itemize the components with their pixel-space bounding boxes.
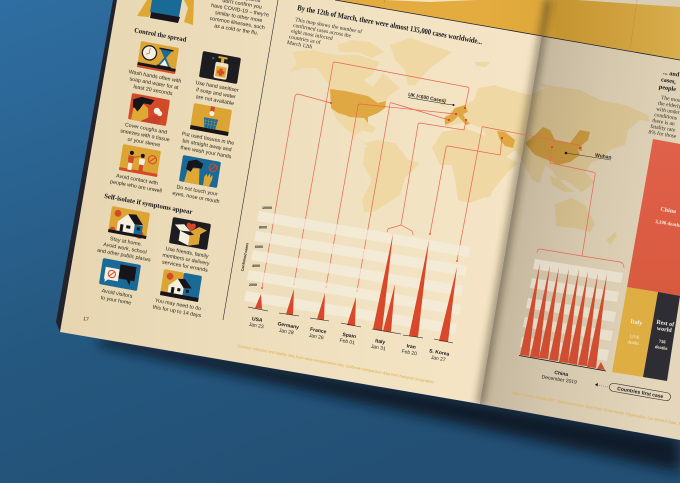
map markers xyxy=(261,102,581,292)
text block: right body: fatality rate xyxy=(650,123,676,134)
bands: China chart xyxy=(520,259,623,361)
China label: December 2019 xyxy=(541,374,577,386)
text block: symptoms note: similar to other more xyxy=(215,10,263,24)
heading: Self-isolate: Self-isolate if symptoms appear xyxy=(104,193,193,216)
icon card: avoid visitors: to your home xyxy=(100,295,132,307)
spike chart: confirmed cases per country xyxy=(255,234,457,342)
label: Wuhan xyxy=(565,152,612,161)
text block: symptoms note: have COVID-19 – they're xyxy=(211,3,269,19)
country labels: USA xyxy=(251,316,263,324)
icon card: up to 14 days: this for up to 14 days xyxy=(152,304,202,319)
country labels: Germany xyxy=(277,321,300,331)
text block: symptoms note: common illnesses, such xyxy=(209,16,265,31)
text block: right body: 8% for those xyxy=(648,129,677,140)
spine shadow xyxy=(480,0,548,404)
icon card: avoid contact xyxy=(110,143,168,195)
icon card: do not touch face: eyes, nose or mouth xyxy=(172,191,220,205)
icon card: friends and delivery: services for errands xyxy=(162,259,208,274)
country labels: France xyxy=(310,327,327,335)
text block: map intro: March 12th xyxy=(286,40,313,51)
icon card: wash hands: soap and water for at xyxy=(129,76,179,91)
chart axis labels xyxy=(241,206,272,287)
text block: symptoms note xyxy=(208,0,271,38)
icon card: cover coughs: Cover coughs and xyxy=(124,122,168,136)
icon card: avoid contact: Avoid contact with xyxy=(116,173,158,187)
treemap: Italy deaths xyxy=(612,287,658,377)
icon card: wash hands: Wash hands often with xyxy=(128,69,182,85)
column divider xyxy=(223,0,278,320)
legend: countries first case: Countries first case xyxy=(617,386,664,400)
country labels: Feb 20 xyxy=(401,349,418,357)
treemap: Italy deaths: deaths xyxy=(627,339,640,346)
chart axis labels: 10000 xyxy=(262,206,272,210)
country labels: Italy xyxy=(375,338,386,346)
text block: right body: conditions xyxy=(654,112,677,122)
treemap: rest of world deaths: deaths xyxy=(655,344,668,351)
treemap: Italy deaths: Italy xyxy=(630,319,643,327)
icon card: stay at home: Stay at home. xyxy=(109,236,142,248)
chart axis labels: 6000 xyxy=(255,245,263,249)
treemap: Italy deaths: 1,016 xyxy=(629,333,640,341)
icon card: up to 14 days xyxy=(152,268,207,319)
text block: map intro xyxy=(286,15,363,59)
panel: left page xyxy=(60,0,548,404)
country labels: Jan 26 xyxy=(308,333,324,341)
China baseline xyxy=(519,356,606,371)
icon card: cover coughs: sneezes with a tissue xyxy=(120,128,170,143)
treemap: rest of world deaths: world xyxy=(656,326,673,334)
text block: map intro: eight most infected xyxy=(290,28,333,42)
treemap: rest of world deaths xyxy=(643,292,680,381)
map: highlighted countries xyxy=(330,89,590,165)
icon card: stay at home xyxy=(97,205,158,264)
icon card: friends and delivery xyxy=(161,216,216,274)
text block: right heading: ... and xyxy=(663,69,680,79)
country labels: Spain xyxy=(342,332,356,340)
country labels: Jan 23 xyxy=(248,322,264,330)
icon card: cover coughs xyxy=(119,92,176,150)
icon card: stay at home: Avoid work, school xyxy=(103,242,147,256)
top yellow banner xyxy=(335,0,680,60)
text block: map intro: This map shows the number of xyxy=(295,16,363,35)
icon card: sanitiser xyxy=(193,51,244,108)
country labels xyxy=(248,316,450,363)
red connector lines xyxy=(262,62,624,291)
icon card: up to 14 days: You may need to do xyxy=(155,298,201,312)
icon card: sanitiser: are not available xyxy=(195,94,234,107)
country labels: Feb 01 xyxy=(339,338,356,346)
icon card: wash hands xyxy=(126,40,186,98)
source line left: Sources: Infection and fatality data from www.worldometers.info; Outbreak comparison data from National Geographic xyxy=(237,343,434,384)
text block: right heading xyxy=(658,69,680,93)
icon card: avoid visitors: Avoid visitors xyxy=(101,288,133,300)
country labels: Jan 27 xyxy=(430,355,446,363)
icon card: stay at home: and other public places xyxy=(97,248,151,264)
country labels: Jan 31 xyxy=(370,344,386,352)
chart axis labels: 2000 xyxy=(249,283,257,287)
treemap: China deaths xyxy=(627,139,680,297)
page number: 17 xyxy=(83,316,89,323)
text block: right body: there is an xyxy=(652,118,675,127)
magazine page stack edge xyxy=(56,0,117,332)
text block: map intro: confirmed cases across the xyxy=(293,22,352,40)
icon card: used tissues bin: bin straight away and xyxy=(182,138,232,153)
text block: right body xyxy=(648,94,680,142)
chart axis labels: 4000 xyxy=(252,264,260,268)
icon card: sanitiser: Use hand sanitiser xyxy=(195,80,239,94)
icon card: used tissues bin: Put used tissues in the xyxy=(181,131,235,147)
label: Wuhan: Wuhan xyxy=(595,153,612,161)
right page shading xyxy=(480,36,680,440)
country labels: Jan 28 xyxy=(278,328,294,336)
icon card: used tissues bin: then wash your hands xyxy=(180,145,232,160)
treemap: rest of world deaths: Rest of xyxy=(656,320,675,329)
treemap: China deaths: China xyxy=(660,207,676,215)
icon card: avoid contact: people who are unwell xyxy=(110,179,162,195)
text block: right heading: people xyxy=(658,84,677,93)
text block: symptoms note: as a cold or the flu. xyxy=(214,23,258,37)
country labels: Iran xyxy=(406,343,416,351)
country labels: S. Korea xyxy=(429,348,450,358)
text block: map intro: countries as of xyxy=(288,33,321,46)
text block: right heading: cases, xyxy=(661,76,677,86)
chart axis labels: 8000 xyxy=(259,226,267,230)
panel: right page xyxy=(480,0,680,440)
icon card: friends and delivery: Use friends, family xyxy=(165,246,209,260)
icon card: do not touch face xyxy=(172,154,226,205)
shadow under magazine xyxy=(100,336,680,472)
chart axis labels: Confirmed cases xyxy=(241,242,249,272)
chart baselines xyxy=(248,307,453,343)
icon card: cover coughs: or your sleeve xyxy=(127,137,161,149)
world map xyxy=(290,38,650,245)
icon card: sanitiser: if soap and water xyxy=(196,87,236,100)
icon card: do not touch face: Do not touch your xyxy=(176,184,218,198)
illustration: person at top of left page xyxy=(137,0,194,25)
legend: countries first case xyxy=(595,383,671,401)
treemap: rest of world deaths: 756 xyxy=(658,339,667,345)
icon card: used tissues bin xyxy=(179,102,239,160)
icon card: avoid visitors xyxy=(96,258,141,307)
icon card: friends and delivery: members or delivery xyxy=(162,253,210,267)
icon card: wash hands: least 20 seconds xyxy=(133,84,173,97)
spike chart: China xyxy=(520,263,607,370)
heading: Control the spread: Control the spread xyxy=(134,27,187,44)
bar chart bands: countries xyxy=(244,211,470,334)
China label: China xyxy=(554,370,569,378)
heading: By the 12th of March: By the 12th of March, there were almost 135,000 cases worldwide... xyxy=(297,3,483,46)
label: UK: UK (<600 Cases) xyxy=(408,92,446,105)
